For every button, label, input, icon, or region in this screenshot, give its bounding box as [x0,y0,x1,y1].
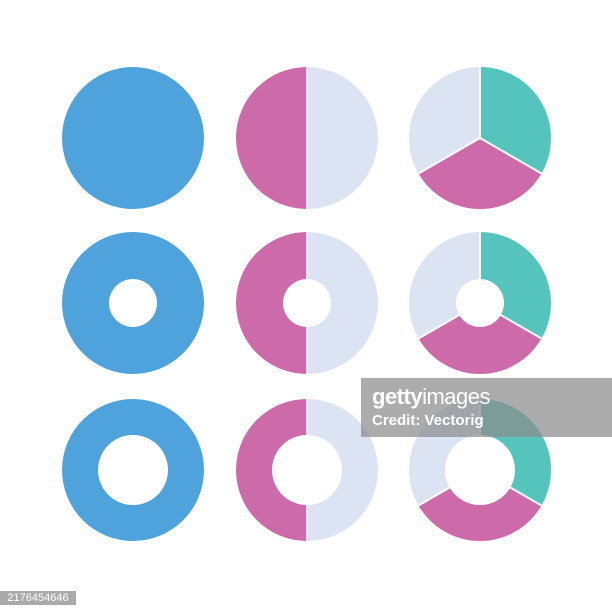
donut: blue small hole [62,232,204,374]
pie: thirds [409,67,551,209]
image id [0,591,76,605]
donut: half small hole [236,232,378,374]
watermark: gettyimages [372,384,490,409]
watermark [361,378,612,437]
pie: full blue [62,67,204,209]
watermark: Credit: Vectorig [372,412,484,429]
donut: thirds large hole [409,399,551,541]
pie: half split [236,67,378,209]
donut: half large hole [236,399,378,541]
donut: blue large hole [62,399,204,541]
donut: thirds small hole [409,232,551,374]
image id: 2176454646 [7,592,69,604]
